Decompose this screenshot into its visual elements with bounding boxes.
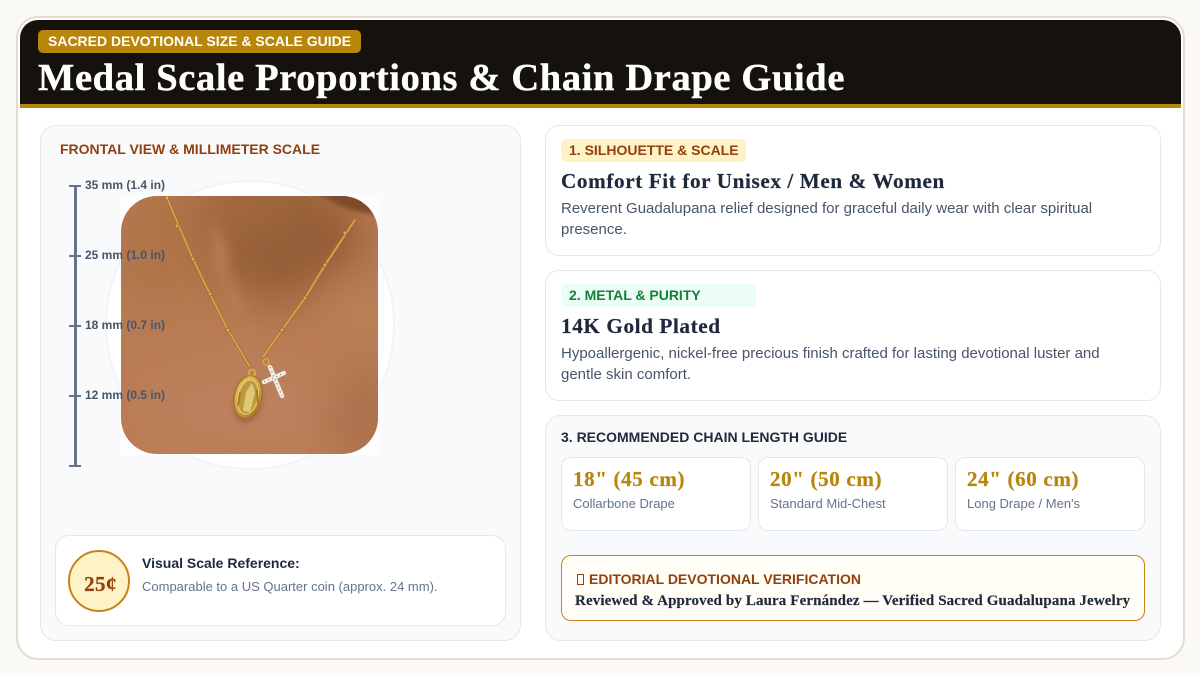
tick 35 mm <box>69 185 81 187</box>
backdrop circle <box>105 180 395 470</box>
length option 20 in <box>758 457 948 531</box>
verification statement: Reviewed & Approved by Laura Fernández — Verified Sacred Guadalupana Jewelry <box>575 593 1130 609</box>
chain <box>167 198 355 367</box>
coin reference card <box>55 535 506 626</box>
verification callout <box>561 555 1145 621</box>
badge: 1. SILHOUETTE & SCALE <box>569 142 739 158</box>
necklace photo <box>120 195 379 455</box>
length option 20 in: 20" (50 cm) <box>770 467 882 491</box>
tick 12 mm <box>69 395 81 397</box>
badge <box>561 139 746 162</box>
card heading: Comfort Fit for Unisex / Men & Women <box>561 169 945 193</box>
icon: quarter coin <box>68 550 130 612</box>
length option 24 in <box>955 457 1145 531</box>
coin description: Comparable to a US Quarter coin (approx. 24 mm). <box>142 579 438 594</box>
chain guide heading: 3. RECOMMENDED CHAIN LENGTH GUIDE <box>561 429 847 445</box>
length option 18 in: 18" (45 cm) <box>573 467 685 491</box>
panel heading: FRONTAL VIEW & MILLIMETER SCALE <box>60 141 320 157</box>
length option 18 in: Collarbone Drape <box>573 496 675 511</box>
card description: gentle skin comfort. <box>561 366 691 383</box>
tick 25 mm <box>69 255 81 257</box>
icon: quarter coin: 25¢ <box>84 572 117 596</box>
length option 24 in: Long Drape / Men's <box>967 496 1080 511</box>
header banner <box>20 20 1181 108</box>
title: Medal Scale Proportions & Chain Drape Guide <box>38 57 845 99</box>
cross <box>263 359 284 396</box>
panel: silhouette and scale <box>545 125 1161 256</box>
card description: presence. <box>561 221 627 238</box>
badge <box>561 284 756 307</box>
length option 20 in: Standard Mid-Chest <box>770 496 886 511</box>
verification heading: EDITORIAL DEVOTIONAL VERIFICATION <box>589 571 861 587</box>
panel: chain length guide <box>545 415 1161 641</box>
millimeter scale <box>74 187 77 465</box>
panel: metal and purity <box>545 270 1161 401</box>
card description <box>561 345 1100 383</box>
card heading: 14K Gold Plated <box>561 314 721 338</box>
label 25 mm: 25 mm (1.0 in) <box>85 248 165 262</box>
medal <box>232 368 264 424</box>
card description: Hypoallergenic, nickel-free precious finish crafted for lasting devotional luster and <box>561 345 1100 362</box>
label 18 mm: 18 mm (0.7 in) <box>85 318 165 332</box>
tick base <box>69 465 81 467</box>
panel: frontal view and scale <box>40 125 521 641</box>
card description <box>561 200 1092 238</box>
length option 24 in: 24" (60 cm) <box>967 467 1079 491</box>
tick 18 mm <box>69 325 81 327</box>
coin heading: Visual Scale Reference: <box>142 555 300 571</box>
length option 18 in <box>561 457 751 531</box>
badge: 2. METAL & PURITY <box>569 287 701 303</box>
header badge: SACRED DEVOTIONAL SIZE & SCALE GUIDE <box>48 33 351 49</box>
card description: Reverent Guadalupana relief designed for graceful daily wear with clear spiritual <box>561 200 1092 217</box>
scale axis <box>74 185 77 467</box>
header badge <box>38 30 361 53</box>
label 35 mm: 35 mm (1.4 in) <box>85 178 165 192</box>
label 12 mm: 12 mm (0.5 in) <box>85 388 165 402</box>
